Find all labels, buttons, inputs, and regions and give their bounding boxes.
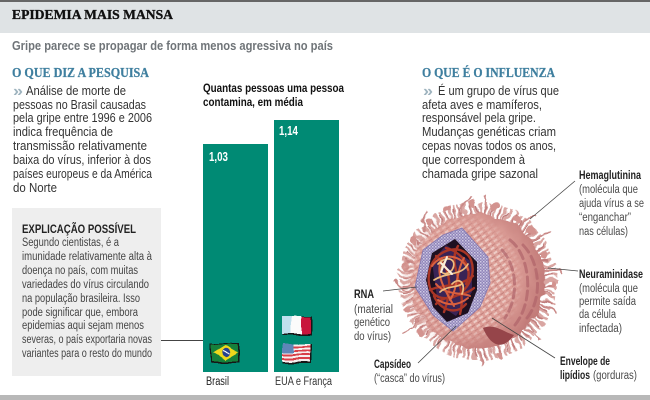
label: Hemaglutinina: “enganchar” xyxy=(579,212,631,224)
subtitle: Gripe parece se propagar de forma menos agressiva no país xyxy=(12,38,333,53)
bar: EUA e França xyxy=(274,120,339,372)
label: RNA: do vírus) xyxy=(354,331,391,343)
header band xyxy=(0,2,650,33)
text block: influenza xyxy=(422,83,559,181)
text block: explicação: na população brasileira. Isso xyxy=(22,293,140,305)
label: Capsídeo xyxy=(374,359,445,385)
bottom rule xyxy=(0,395,650,400)
interior xyxy=(426,239,477,322)
icon: flag Brazil xyxy=(210,343,240,363)
label: Capsídeo: (“casca” do vírus) xyxy=(374,373,445,385)
label: Envelope de lipídios: Envelope de xyxy=(560,356,610,368)
heading: pesquisa: O QUE DIZ A PESQUISA xyxy=(12,65,149,80)
icon: flag USA xyxy=(282,344,312,364)
text block: pesquisa: indica frequência de xyxy=(13,125,113,139)
text block: explicação: variedades do vírus circulando xyxy=(22,279,149,291)
heading: explicação: EXPLICAÇÃO POSSÍVEL xyxy=(22,223,136,236)
illustration: influenza virus xyxy=(396,197,561,364)
icon: flag France xyxy=(282,316,312,336)
bar: Brasil: 1,03 xyxy=(209,150,228,164)
text block: explicação xyxy=(22,237,152,360)
panel: o que diz a pesquisa xyxy=(12,65,152,195)
text block: influenza: que correspondem à xyxy=(422,153,525,167)
text block: explicação: Segundo cientistas, é a xyxy=(22,237,119,249)
text block: influenza: afeta aves e mamíferos, xyxy=(422,98,542,112)
label: Neuraminidase: infectada) xyxy=(579,323,622,335)
label: Neuraminidase: (molécula que xyxy=(579,283,638,295)
label: RNA: (material xyxy=(354,304,393,316)
text block: pesquisa: do Norte xyxy=(13,181,57,195)
label: Envelope de lipídios: lipídios xyxy=(560,370,590,382)
label: RNA: genético xyxy=(354,317,390,329)
panel: o que é o influenza xyxy=(422,65,559,181)
text block: pesquisa xyxy=(13,83,152,195)
text block: influenza: responsável pela gripe. xyxy=(422,111,536,125)
label: Envelope de lipídios: (gorduras) xyxy=(593,370,637,382)
text block: influenza: chamada gripe sazonal xyxy=(422,167,538,181)
bar chart xyxy=(203,83,347,388)
panel: explicação possível xyxy=(12,208,161,376)
label: Envelope de lipídios xyxy=(560,356,637,382)
text block: influenza: » xyxy=(423,83,433,100)
label: Neuraminidase xyxy=(579,269,643,335)
text block: pesquisa: transmissão relativamente xyxy=(13,139,147,153)
label: Hemaglutinina xyxy=(579,170,644,238)
spikes and envelope xyxy=(396,197,561,364)
text block: influenza: Mudanças genéticas criam xyxy=(422,125,556,139)
leader lines xyxy=(383,181,578,363)
title: EPIDEMIA MAIS MANSA xyxy=(12,8,174,23)
text block: explicação: pode significar que, embora xyxy=(22,307,138,319)
RNA xyxy=(429,246,474,314)
label: Hemaglutinina: (molécula que xyxy=(579,184,638,196)
label: RNA: RNA xyxy=(354,289,374,301)
chart title: contamina, em média xyxy=(203,97,304,109)
text block: pesquisa: Análise de morte de xyxy=(26,84,126,98)
shaded right side xyxy=(502,240,538,325)
text block: pesquisa: países europeus e da América xyxy=(13,167,152,181)
label: Brasil: Brasil xyxy=(206,376,229,388)
text block: explicação: variantes para o resto do mundo xyxy=(22,348,152,360)
text block: explicação: epidemias aqui sejam menos xyxy=(22,320,144,332)
label: EUA e França: EUA e França xyxy=(275,376,332,388)
bar: EUA e França: 1,14 xyxy=(279,124,298,138)
chart title: Quantas pessoas uma pessoa xyxy=(203,83,345,95)
text block: explicação: doença no país, com muitas xyxy=(22,265,138,277)
connector: explicação to Brasil bar xyxy=(161,340,203,342)
text block: pesquisa: » xyxy=(13,83,23,100)
label: Neuraminidase: permite saída xyxy=(579,296,636,308)
text block: influenza: cepas novas todos os anos, xyxy=(422,139,556,153)
text block: explicação: severas, o país exportaria novas xyxy=(22,334,152,346)
top rule xyxy=(0,0,650,2)
text block: influenza: É um grupo de vírus que xyxy=(438,83,559,98)
label: Capsídeo: Capsídeo xyxy=(374,359,411,371)
heading: influenza: O QUE É O INFLUENZA xyxy=(422,65,555,80)
text block: pesquisa: pessoas no Brasil causadas xyxy=(13,98,146,112)
label: RNA xyxy=(354,289,393,343)
text block: pesquisa: pela gripe entre 1996 e 2006 xyxy=(13,111,152,125)
bar: Brasil xyxy=(203,144,268,372)
text block: pesquisa: baixa do vírus, inferior à dos xyxy=(13,153,151,167)
label: Hemaglutinina: nas células) xyxy=(579,226,628,238)
text block: explicação: imunidade relativamente alta à xyxy=(22,251,152,263)
capsid xyxy=(415,228,490,331)
label: Neuraminidase: da célula xyxy=(579,309,616,321)
